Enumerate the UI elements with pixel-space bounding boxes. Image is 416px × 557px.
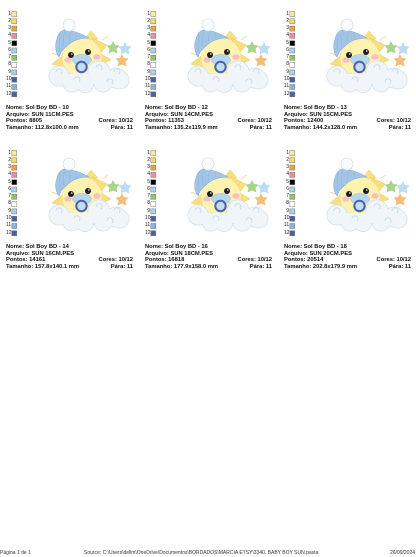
swatch numbers: 10 bbox=[6, 76, 12, 82]
design details: Cores: 10/12 bbox=[238, 118, 272, 124]
design details bbox=[145, 244, 272, 270]
panel: design 13 bbox=[284, 11, 411, 131]
design details: Pontos: 20514 bbox=[284, 257, 323, 263]
design details: Pontos: 16818 bbox=[145, 257, 184, 263]
design details: Nome: Sol Boy BD - 16 bbox=[145, 244, 208, 250]
swatch numbers: 4 bbox=[147, 32, 150, 38]
swatch numbers: 3 bbox=[286, 25, 289, 31]
swatch numbers bbox=[145, 11, 151, 97]
swatch numbers: 7 bbox=[147, 54, 150, 60]
swatch numbers: 8 bbox=[147, 61, 150, 67]
design details: Arquivo: SUN 15CM.PES bbox=[284, 112, 352, 118]
design details: Pára: 11 bbox=[111, 264, 133, 270]
swatch numbers: 7 bbox=[8, 193, 11, 199]
swatch numbers: 6 bbox=[8, 47, 11, 53]
swatch numbers: 3 bbox=[147, 164, 150, 170]
design details: Pontos: 14161 bbox=[6, 257, 45, 263]
design details: Arquivo: SUN 16CM.PES bbox=[6, 251, 74, 257]
design details: Pára: 11 bbox=[250, 264, 272, 270]
swatch numbers: 12 bbox=[145, 230, 151, 236]
design details: Cores: 10/12 bbox=[99, 257, 133, 263]
swatch numbers: 9 bbox=[147, 208, 150, 214]
swatch numbers: 5 bbox=[147, 40, 150, 46]
color swatches bbox=[150, 150, 156, 236]
color swatches bbox=[150, 11, 156, 98]
swatch numbers: 5 bbox=[8, 179, 11, 185]
panel: design 14 bbox=[6, 150, 133, 270]
panel: design 16 bbox=[145, 150, 272, 270]
embroidery image: baby sun on cloud bbox=[48, 18, 132, 93]
swatch numbers: 12 bbox=[6, 91, 12, 97]
swatch numbers: 8 bbox=[8, 61, 11, 67]
swatch numbers: 9 bbox=[8, 69, 11, 75]
design details: Nome: Sol Boy BD - 14 bbox=[6, 244, 69, 250]
swatch numbers: 6 bbox=[286, 47, 289, 53]
swatch numbers: 4 bbox=[286, 32, 289, 38]
design details: Nome: Sol Boy BD - 18 bbox=[284, 244, 347, 250]
design details: Nome: Sol Boy BD - 12 bbox=[145, 105, 208, 111]
swatch numbers: 6 bbox=[8, 186, 11, 192]
swatch numbers: 8 bbox=[8, 200, 11, 206]
swatch numbers: 3 bbox=[286, 164, 289, 170]
design details: Pára: 11 bbox=[111, 125, 133, 131]
swatch numbers: 8 bbox=[286, 200, 289, 206]
swatch numbers: 11 bbox=[145, 83, 150, 89]
panel: design 12 bbox=[145, 11, 272, 131]
design details: Pára: 11 bbox=[389, 264, 411, 270]
swatch numbers: 12 bbox=[284, 230, 290, 236]
design details: Tamanho: 177.9x158.0 mm bbox=[145, 264, 218, 270]
footer: date: 26/09/2024 bbox=[390, 550, 415, 556]
swatch numbers: 3 bbox=[8, 164, 11, 170]
swatch numbers: 1 bbox=[286, 11, 289, 17]
swatch numbers: 11 bbox=[6, 83, 11, 89]
swatch numbers: 7 bbox=[286, 193, 289, 199]
swatch numbers bbox=[284, 150, 290, 236]
design details: Pára: 11 bbox=[389, 125, 411, 131]
swatch numbers: 9 bbox=[147, 69, 150, 75]
swatch numbers: 3 bbox=[147, 25, 150, 31]
swatch numbers: 4 bbox=[147, 171, 150, 177]
swatch numbers: 2 bbox=[147, 157, 150, 163]
swatch numbers: 1 bbox=[8, 150, 11, 156]
panel: design 18 bbox=[284, 150, 411, 270]
design details: Pára: 11 bbox=[250, 125, 272, 131]
swatch numbers bbox=[145, 150, 151, 236]
swatch numbers bbox=[6, 150, 12, 236]
panel: design 10 bbox=[6, 11, 133, 131]
design details: Arquivo: SUN 20CM.PES bbox=[284, 251, 352, 257]
swatch numbers: 2 bbox=[286, 157, 289, 163]
swatch numbers: 5 bbox=[286, 179, 289, 185]
swatch numbers: 10 bbox=[284, 215, 290, 221]
swatch numbers: 10 bbox=[284, 76, 290, 82]
design details bbox=[145, 105, 272, 131]
design details: Pontos: 11353 bbox=[145, 118, 184, 124]
swatch numbers: 3 bbox=[8, 25, 11, 31]
swatch numbers: 4 bbox=[286, 171, 289, 177]
swatch numbers: 11 bbox=[6, 222, 11, 228]
swatch numbers bbox=[6, 11, 12, 97]
swatch numbers: 1 bbox=[8, 11, 11, 17]
swatch numbers: 10 bbox=[145, 76, 151, 82]
swatch numbers: 11 bbox=[284, 83, 289, 89]
color swatches bbox=[12, 150, 18, 236]
swatch numbers: 1 bbox=[147, 11, 150, 17]
design details: Pontos: 12400 bbox=[284, 118, 323, 124]
swatch numbers: 1 bbox=[286, 150, 289, 156]
swatch numbers: 12 bbox=[6, 230, 12, 236]
design details: Tamanho: 157.8x140.1 mm bbox=[6, 264, 79, 270]
design details: Arquivo: SUN 11CM.PES bbox=[6, 112, 74, 118]
design details: Pontos: 8805 bbox=[6, 118, 42, 124]
swatch numbers: 11 bbox=[284, 222, 289, 228]
swatch numbers: 10 bbox=[6, 215, 12, 221]
swatch numbers: 2 bbox=[286, 18, 289, 24]
design details: Arquivo: SUN 14CM.PES bbox=[145, 112, 213, 118]
embroidery image: baby sun on cloud bbox=[188, 18, 270, 93]
color swatches bbox=[12, 11, 18, 98]
swatch numbers: 4 bbox=[8, 32, 11, 38]
embroidery image: baby sun on cloud bbox=[188, 158, 270, 232]
swatch numbers: 9 bbox=[286, 208, 289, 214]
swatch numbers: 7 bbox=[147, 193, 150, 199]
embroidery image: baby sun on cloud bbox=[48, 158, 132, 232]
swatch numbers: 7 bbox=[286, 54, 289, 60]
swatch numbers: 2 bbox=[147, 18, 150, 24]
footer: source path: Source: C:\Users\dellm\OneDrive\Documentos\BORDADOS\MARCIA ETSY\3340. BABY BOY SUN.pasta bbox=[84, 550, 318, 556]
design details: Tamanho: 112.8x100.0 mm bbox=[6, 125, 79, 131]
swatch numbers: 9 bbox=[286, 69, 289, 75]
design details: Cores: 10/12 bbox=[377, 257, 411, 263]
design details: Cores: 10/12 bbox=[99, 118, 133, 124]
design details: Arquivo: SUN 18CM.PES bbox=[145, 251, 213, 257]
embroidery image: baby sun on cloud bbox=[326, 158, 410, 232]
design details: Tamanho: 202.8x179.9 mm bbox=[284, 264, 357, 270]
swatch numbers: 6 bbox=[286, 186, 289, 192]
swatch numbers: 2 bbox=[8, 18, 11, 24]
swatch numbers: 6 bbox=[147, 47, 150, 53]
design details: Nome: Sol Boy BD - 13 bbox=[284, 105, 347, 111]
swatch numbers bbox=[284, 11, 290, 97]
swatch numbers: 5 bbox=[147, 179, 150, 185]
footer: page number: Página 1 de 1 bbox=[0, 550, 31, 556]
swatch numbers: 1 bbox=[147, 150, 150, 156]
design details: Tamanho: 144.2x128.0 mm bbox=[284, 125, 357, 131]
swatch numbers: 5 bbox=[8, 40, 11, 46]
swatch numbers: 12 bbox=[145, 91, 151, 97]
swatch numbers: 7 bbox=[8, 54, 11, 60]
swatch numbers: 4 bbox=[8, 171, 11, 177]
swatch numbers: 11 bbox=[145, 222, 150, 228]
design details bbox=[284, 105, 411, 131]
swatch numbers: 12 bbox=[284, 91, 290, 97]
swatch numbers: 8 bbox=[147, 200, 150, 206]
design details bbox=[6, 244, 133, 270]
swatch numbers: 9 bbox=[8, 208, 11, 214]
design details bbox=[6, 105, 133, 131]
color swatches bbox=[290, 11, 296, 98]
swatch numbers: 10 bbox=[145, 215, 151, 221]
swatch numbers: 5 bbox=[286, 40, 289, 46]
design details: Cores: 10/12 bbox=[377, 118, 411, 124]
design details bbox=[284, 244, 411, 270]
swatch numbers: 2 bbox=[8, 157, 11, 163]
swatch numbers: 8 bbox=[286, 61, 289, 67]
color swatches bbox=[290, 150, 296, 236]
swatch numbers: 6 bbox=[147, 186, 150, 192]
design details: Cores: 10/12 bbox=[238, 257, 272, 263]
embroidery image: baby sun on cloud bbox=[326, 18, 410, 93]
design details: Nome: Sol Boy BD - 10 bbox=[6, 105, 69, 111]
design details: Tamanho: 135.2x119.9 mm bbox=[145, 125, 218, 131]
